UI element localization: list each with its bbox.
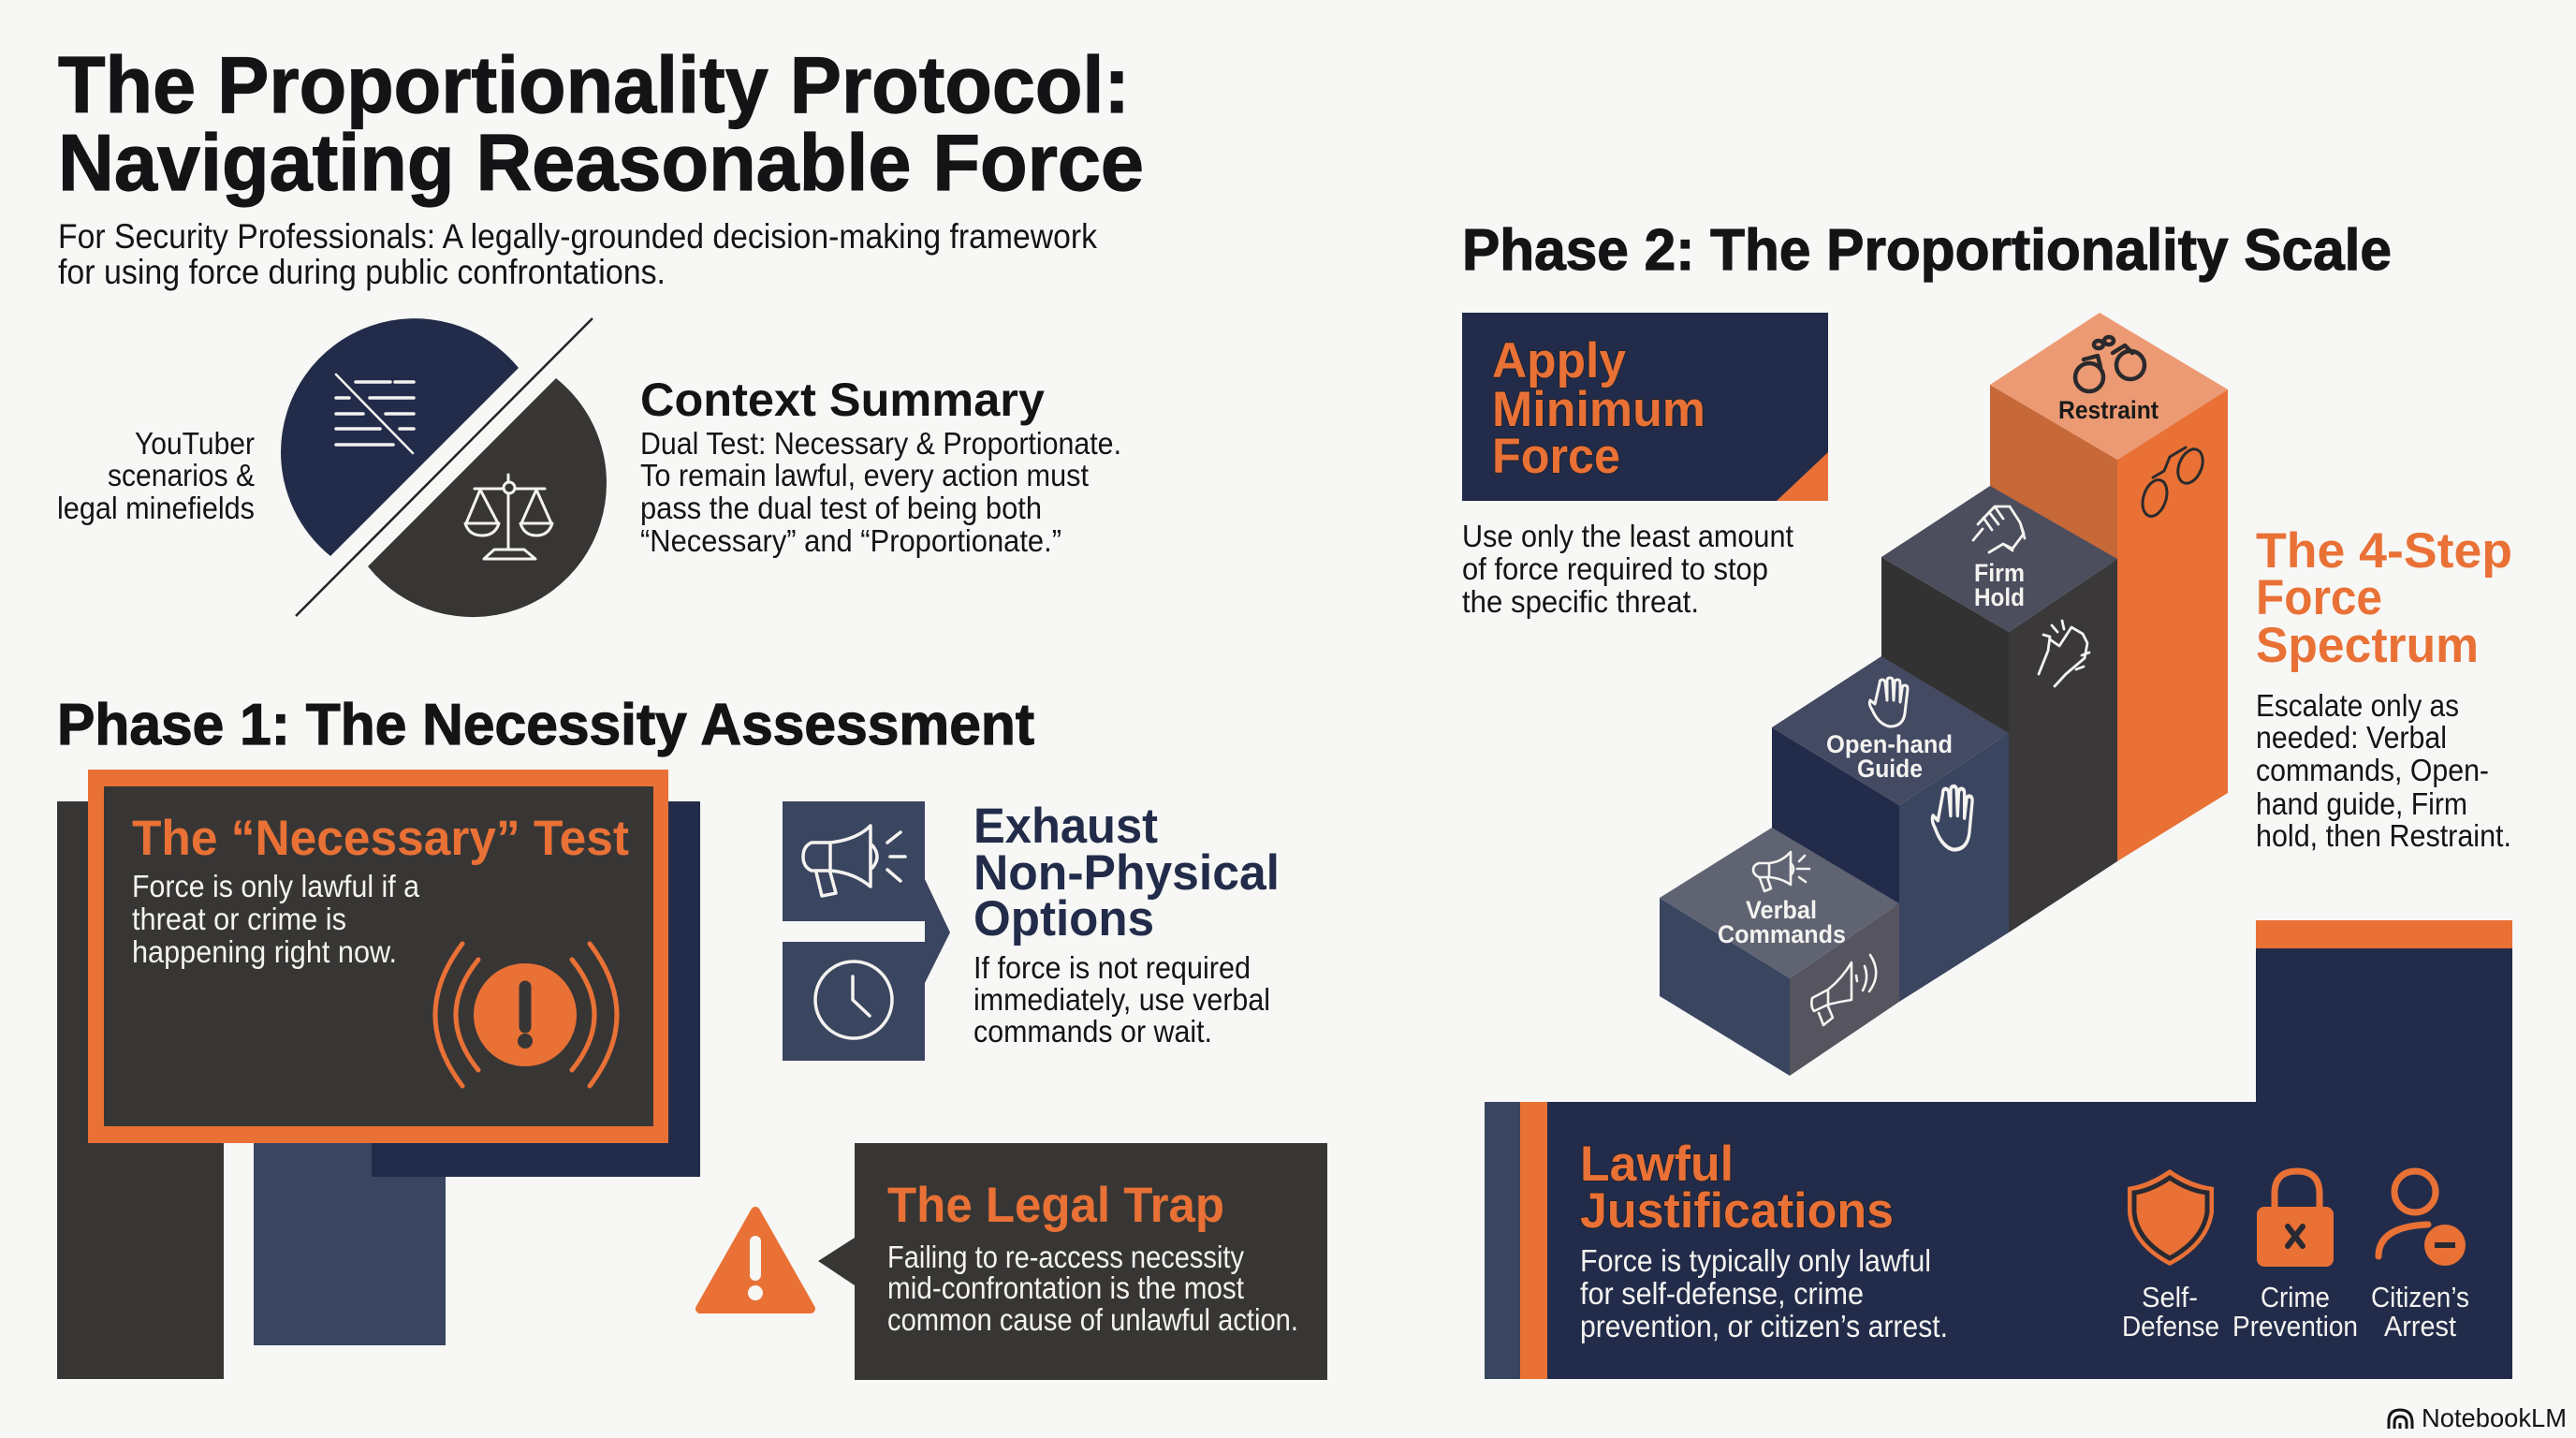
text: necessary test body: happening right now. xyxy=(132,934,397,969)
text: legal trap body: mid-confrontation is the most xyxy=(887,1270,1244,1305)
label: crime prevention: Prevention xyxy=(2232,1310,2358,1343)
text: force spectrum body: needed: Verbal xyxy=(2256,720,2447,755)
label: crime prevention xyxy=(2232,1281,2358,1343)
heading: phase 1: Phase 1: The Necessity Assessment xyxy=(57,693,1034,757)
text: force spectrum body: Escalate only as xyxy=(2256,688,2459,723)
heading: phase 2: Phase 2: The Proportionality Scale xyxy=(1462,218,2392,283)
heading: lawful justifications: Justifications xyxy=(1580,1183,1894,1239)
label: crime prevention: Crime xyxy=(2261,1281,2330,1313)
label: self-defense: Defense xyxy=(2122,1310,2219,1343)
context summary: pass the dual test of being both xyxy=(640,491,1042,525)
text: necessary test body: threat or crime is xyxy=(132,902,346,936)
icon: gripping hands top xyxy=(1973,506,2025,552)
heading: lawful justifications: Lawful xyxy=(1580,1137,1734,1192)
panel: lawful justifications xyxy=(1485,920,2512,1379)
icon: lock xyxy=(2257,1171,2334,1267)
panel: apply minimum force: Minimum xyxy=(1492,382,1705,437)
text: legal trap body: common cause of unlawful action. xyxy=(887,1302,1298,1337)
text: apply minimum force body: of force required to stop xyxy=(1462,551,1768,586)
subtitle xyxy=(58,217,1097,291)
text: apply minimum force body: the specific threat. xyxy=(1462,584,1699,619)
text: scenario label: YouTuber xyxy=(135,426,255,461)
text: scenario label xyxy=(57,426,255,525)
icon: megaphone top xyxy=(1753,852,1809,891)
subtitle: for using force during public confrontations. xyxy=(58,253,666,291)
heading: exhaust options xyxy=(973,799,1280,946)
label: self-defense: Self- xyxy=(2142,1281,2198,1313)
text: exhaust non-physical options xyxy=(973,799,1280,1049)
panel: legal trap xyxy=(818,1143,1327,1380)
chart: force spectrum staircase xyxy=(1660,313,2228,1076)
heading: lawful justifications xyxy=(1580,1137,1894,1239)
panel: apply minimum force: Force xyxy=(1492,429,1620,484)
icon: handcuffs side xyxy=(2138,446,2207,520)
text: lawful justifications body xyxy=(1580,1243,1948,1343)
context summary: “Necessary” and “Proportionate.” xyxy=(640,523,1061,558)
icon: open hand top xyxy=(1869,678,1908,726)
step 4: restraint xyxy=(1990,313,2228,861)
icon: open hand side xyxy=(1932,786,1972,850)
text: force spectrum body: hold, then Restraint. xyxy=(2256,818,2511,853)
icon: megaphone side xyxy=(1811,955,1876,1025)
panel: apply minimum force xyxy=(1462,313,1828,501)
icon: warning triangle xyxy=(700,1211,811,1309)
heading: necessary test: The “Necessary” Test xyxy=(132,811,629,866)
text: lawful justifications body: for self-defense, crime xyxy=(1580,1276,1864,1311)
text: force spectrum body: commands, Open- xyxy=(2256,753,2489,787)
step 2: open-hand guide xyxy=(1772,656,2009,1002)
text: apply minimum force body: Use only the least amount xyxy=(1462,519,1793,553)
step 1: verbal commands: Commands xyxy=(1718,920,1846,948)
label: citizen's arrest: Arrest xyxy=(2384,1310,2456,1343)
context summary: To remain lawful, every action must xyxy=(640,458,1089,492)
text: exhaust non-physical options: immediately, use verbal xyxy=(973,982,1270,1017)
text: apply minimum force body xyxy=(1462,519,1793,619)
panel: legal trap: The Legal Trap xyxy=(887,1178,1224,1233)
step 4: restraint: Restraint xyxy=(2058,396,2159,424)
subtitle: For Security Professionals: A legally-grounded decision-making framework xyxy=(58,217,1097,256)
text: force spectrum body xyxy=(2256,688,2511,853)
icon: alarm xyxy=(435,944,617,1086)
step 3: firm hold xyxy=(1881,486,2117,932)
icon: megaphone box xyxy=(783,801,950,983)
text: lawful justifications body: Force is typically only lawful xyxy=(1580,1243,1931,1278)
diagonal divider line xyxy=(296,318,593,616)
label: self-defense xyxy=(2122,1281,2219,1343)
heading: exhaust options: Exhaust xyxy=(973,799,1158,854)
footer: NotebookLM logo: NotebookLM xyxy=(2422,1403,2567,1432)
context summary xyxy=(640,374,1121,558)
step 1: verbal commands: Verbal xyxy=(1746,896,1817,924)
panel: necessary test xyxy=(57,770,700,1379)
text: lawful justifications body: prevention, or citizen’s arrest. xyxy=(1580,1309,1948,1343)
panel: apply minimum force: Apply xyxy=(1492,333,1626,389)
icon: handcuffs top xyxy=(2075,337,2144,391)
text: exhaust non-physical options: commands or wait. xyxy=(973,1014,1212,1049)
context summary: Context Summary xyxy=(640,374,1045,426)
text: necessary test body xyxy=(132,869,420,969)
text: necessary test body: Force is only lawful if a xyxy=(132,869,420,903)
dark half with scales icon xyxy=(368,378,607,617)
heading: 4-step force spectrum: Force xyxy=(2256,570,2382,625)
heading: 4-step force spectrum xyxy=(2256,523,2512,673)
title xyxy=(58,41,1144,208)
label: citizen's arrest: Citizen’s xyxy=(2371,1281,2469,1313)
step 2: open-hand guide: Guide xyxy=(1857,755,1923,783)
navy half with document icon xyxy=(281,318,519,556)
heading: exhaust options: Options xyxy=(973,891,1154,946)
step 2: open-hand guide: Open-hand xyxy=(1826,730,1953,758)
heading: exhaust options: Non-Physical xyxy=(973,845,1280,901)
text: exhaust non-physical options: If force is not required xyxy=(973,950,1251,985)
text: force spectrum body: hand guide, Firm xyxy=(2256,786,2467,821)
panel: icon boxes xyxy=(783,801,950,1061)
text: legal trap body xyxy=(887,1240,1298,1337)
label: citizen's arrest xyxy=(2371,1281,2469,1343)
split circle graphic xyxy=(281,318,607,617)
text: scenario label: legal minefields xyxy=(57,491,255,525)
icon: person with minus xyxy=(2378,1171,2466,1266)
context summary: Dual Test: Necessary & Proportionate. xyxy=(640,426,1121,461)
icon: clock box xyxy=(783,942,925,1061)
heading: 4-step force spectrum: Spectrum xyxy=(2256,618,2479,673)
icon: gripping hands side xyxy=(2039,621,2089,686)
text: legal trap body: Failing to re-access necessity xyxy=(887,1240,1244,1274)
heading: 4-step force spectrum: The 4-Step xyxy=(2256,523,2512,579)
text: scenario label: scenarios & xyxy=(108,458,255,492)
title: The Proportionality Protocol: xyxy=(58,41,1130,130)
step 3: firm hold: Hold xyxy=(1974,583,2025,611)
icon: shield xyxy=(2128,1169,2214,1266)
title: Navigating Reasonable Force xyxy=(58,119,1144,208)
step 1: verbal commands xyxy=(1660,828,1899,1076)
step 3: firm hold: Firm xyxy=(1974,559,2025,587)
